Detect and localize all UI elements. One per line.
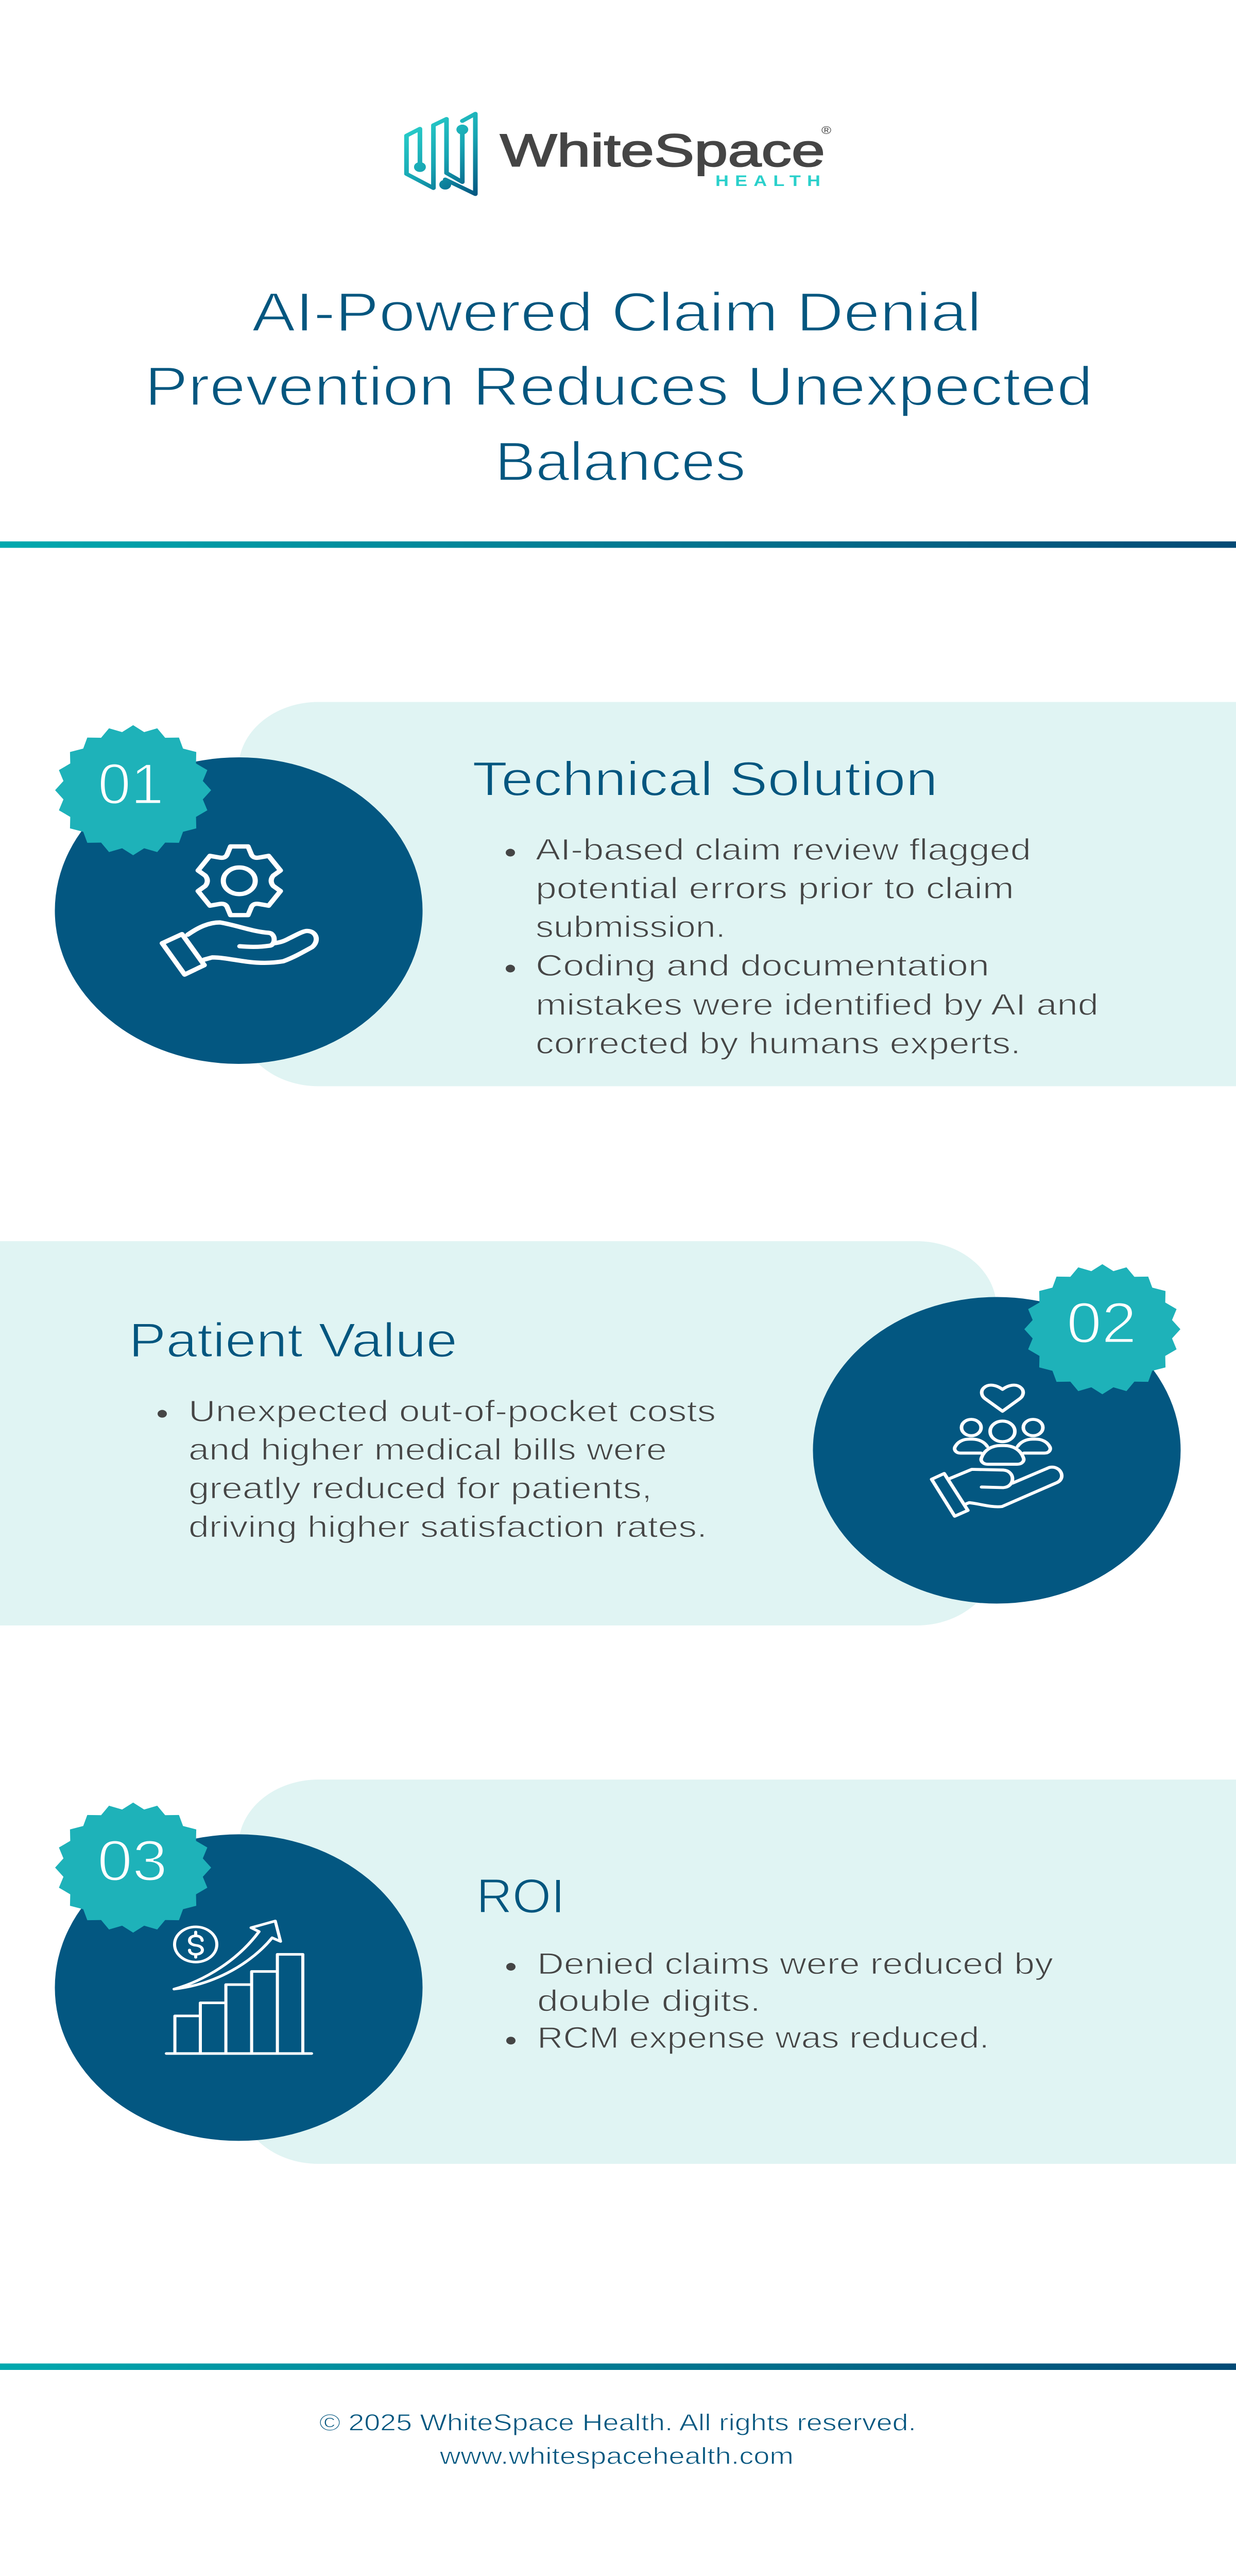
icon: gear in hand: [162, 846, 316, 975]
circle: [55, 1834, 422, 2141]
bullet list: AI-based claim review flagged: [536, 833, 1031, 867]
heading: ROI: [476, 1869, 565, 1923]
bullet list: [158, 1395, 716, 1544]
logo: [406, 114, 832, 194]
title: Prevention Reduces Unexpected: [145, 355, 1093, 417]
bullet list: Denied claims were reduced by: [537, 1947, 1054, 1980]
bullet list: greatly reduced for patients,: [188, 1471, 652, 1505]
panel: patient value: [0, 1241, 1180, 1625]
title: Balances: [495, 431, 746, 492]
bullet list: Coding and documentation: [536, 949, 989, 982]
badge 03: 03: [97, 1829, 167, 1893]
circle: [55, 757, 422, 1064]
bullet list: [506, 1947, 1054, 2055]
badge 03: [55, 1803, 211, 1933]
panel background: [0, 1241, 997, 1625]
logo wordmark: WhiteSpace: [500, 125, 825, 176]
bullet list: submission.: [536, 910, 726, 944]
footer: [319, 2410, 916, 2469]
bullet list: [506, 833, 1098, 1060]
panel: technical solution: [55, 702, 1236, 1086]
badge 01: 01: [98, 752, 164, 816]
bullet list: mistakes were identified by AI and: [536, 988, 1098, 1022]
bullet list: potential errors prior to claim: [536, 872, 1014, 905]
bullet list: Unexpected out-of-pocket costs: [188, 1395, 716, 1428]
footer: www.whitespacehealth.com: [439, 2443, 794, 2469]
badge 01: [55, 725, 211, 855]
bullet list: double digits.: [537, 1984, 761, 2018]
logo mark: [406, 114, 475, 194]
top gradient rule: [0, 541, 1236, 548]
panel background: [238, 702, 1236, 1086]
logo health label: HEALTH: [715, 173, 820, 190]
bullet list: corrected by humans experts.: [536, 1026, 1021, 1060]
panel: roi: [55, 1780, 1236, 2164]
circle: [813, 1297, 1180, 1603]
badge 02: [1024, 1264, 1180, 1394]
bullet list: driving higher satisfaction rates.: [188, 1510, 707, 1544]
bottom gradient rule: [0, 2364, 1236, 2370]
heading: Patient Value: [129, 1313, 457, 1367]
registered mark: ®: [821, 124, 832, 137]
bullet list: RCM expense was reduced.: [537, 2021, 989, 2055]
badge 02: 02: [1067, 1291, 1137, 1355]
footer: © 2025 WhiteSpace Health. All rights reserved.: [319, 2410, 916, 2435]
heading: Technical Solution: [472, 752, 938, 806]
icon: dollar coin and rising bar chart: [166, 1921, 312, 2054]
title: AI-Powered Claim Denial: [252, 281, 982, 343]
title: [145, 281, 1093, 492]
bullet list: and higher medical bills were: [188, 1433, 667, 1466]
panel background: [238, 1780, 1236, 2164]
icon: people in hand with heart: [932, 1385, 1062, 1516]
